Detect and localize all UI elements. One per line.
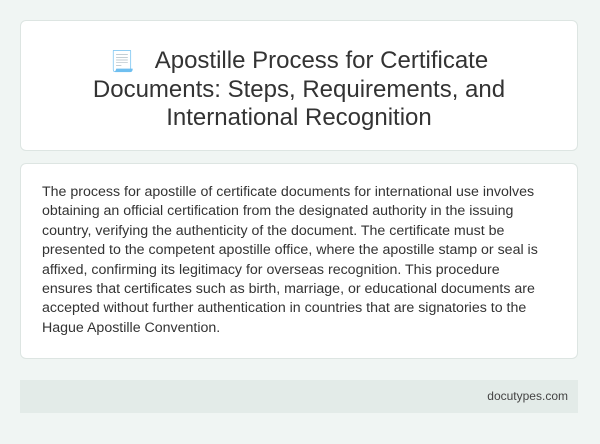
title [93, 47, 505, 131]
text block: The process for apostille of certificate documents for international use involves obtaining an official certification from the designated authority in the issuing country, verifying the authenticity of the document. The certificate must be presented to the competent apostille office, where the apostille stamp or seal is affixed, confirming its legitimacy for overseas recognition. This procedure ensures that certificates such as birth, marriage, or educational documents are accepted without further authentication in countries that are signatories to the Hague Apostille Convention. [42, 184, 538, 336]
footer [20, 380, 578, 413]
title panel [20, 20, 578, 151]
title: Documents: Steps, Requirements, and [93, 76, 505, 103]
title: 📃 Apostille Process for Certificate [110, 47, 488, 74]
panel: description [20, 163, 578, 359]
footer: docutypes.com [487, 389, 568, 403]
title: International Recognition [166, 104, 432, 131]
